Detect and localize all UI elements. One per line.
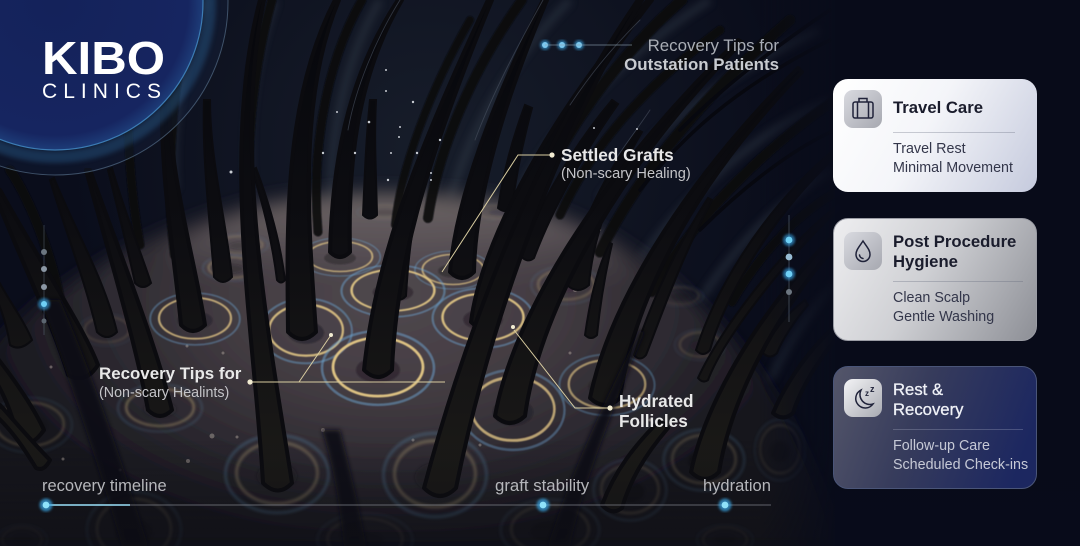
callout: hydrated follicles xyxy=(619,391,694,431)
callout: settled grafts xyxy=(561,145,691,182)
card: travel care: Travel Rest xyxy=(893,141,966,157)
card: travel care xyxy=(833,79,1037,192)
top heading dots xyxy=(540,40,632,50)
callout: recovery tips xyxy=(99,364,242,401)
timeline label: recovery timeline: recovery timeline xyxy=(42,477,167,495)
top heading xyxy=(624,36,779,74)
icon: water drop xyxy=(844,232,882,270)
card: travel care: Minimal Movement xyxy=(893,160,1013,176)
card: rest and recovery: Follow-up Care xyxy=(893,438,990,454)
callout: settled grafts: Settled Grafts xyxy=(561,145,674,165)
connector: settled grafts xyxy=(442,152,555,272)
floating sparkles xyxy=(230,69,638,181)
timeline xyxy=(40,498,771,512)
card: travel care: Travel Care xyxy=(893,98,983,117)
card: post procedure hygiene: Post Procedure xyxy=(893,232,1016,251)
icon: moon with z: z xyxy=(865,389,869,398)
skin mound xyxy=(0,192,840,546)
card: rest and recovery: Rest & xyxy=(893,380,943,399)
thin upper strands and rim highlights xyxy=(348,0,835,230)
right side indicator dots xyxy=(783,215,795,322)
connector: hydrated follicles xyxy=(511,325,613,411)
card: rest and recovery: Scheduled Check-ins xyxy=(893,457,1028,473)
logo wordmark xyxy=(42,36,165,102)
timeline label: graft stability: graft stability xyxy=(495,476,589,495)
icon: moon with z: z xyxy=(870,384,875,394)
icon: moon with z xyxy=(844,379,882,417)
callout: hydrated follicles: Follicles xyxy=(619,411,688,431)
left side indicator dots xyxy=(38,225,50,335)
connector: recovery tips xyxy=(247,333,445,385)
bottom and right edge fade xyxy=(0,440,1080,546)
top heading: Recovery Tips for xyxy=(648,36,779,55)
follicle rings, rear xyxy=(0,204,805,546)
hair strands: blurred foreground xyxy=(40,300,644,546)
card: rest and recovery: Recovery xyxy=(893,400,963,419)
top heading: Outstation Patients xyxy=(624,55,779,74)
logo badge xyxy=(0,0,228,175)
callout: settled grafts: (Non-scary Healing) xyxy=(561,166,691,182)
card: post procedure hygiene xyxy=(833,218,1037,341)
hair strands: rear xyxy=(0,100,840,382)
card: post procedure hygiene: Gentle Washing xyxy=(893,309,994,325)
callout: recovery tips: (Non-scary Healints) xyxy=(99,385,229,401)
card: rest and recovery xyxy=(833,366,1037,489)
icon: suitcase xyxy=(844,90,882,128)
skin speckle xyxy=(50,229,652,472)
faint background strands xyxy=(174,0,840,380)
extra dark rear strands over scalp horizon xyxy=(0,0,840,302)
hair strands: main xyxy=(0,0,862,511)
callout: hydrated follicles: Hydrated xyxy=(619,391,694,411)
card: post procedure hygiene: Hygiene xyxy=(893,252,958,271)
follicle rings, bright front xyxy=(150,238,655,450)
card: post procedure hygiene: Clean Scalp xyxy=(893,290,970,306)
timeline label: hydration: hydration xyxy=(703,477,771,495)
callout: recovery tips: Recovery Tips for xyxy=(99,364,241,383)
